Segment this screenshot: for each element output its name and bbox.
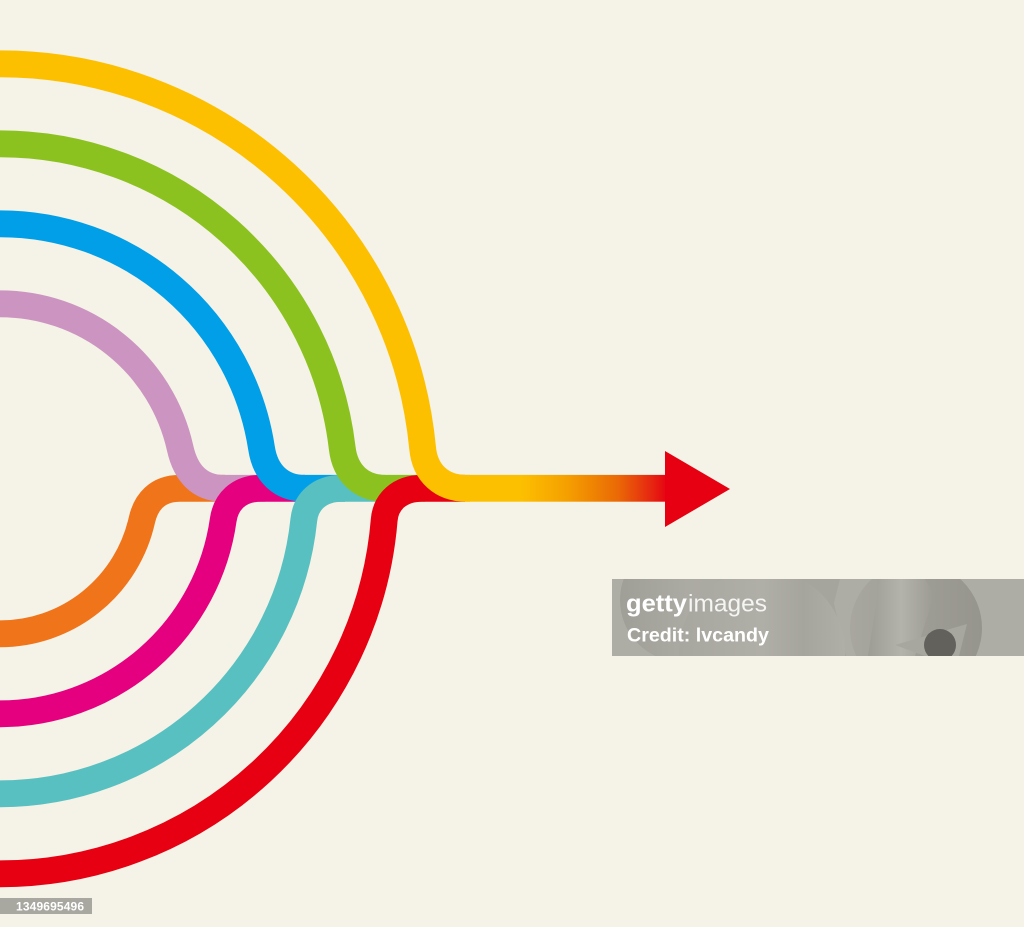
orange line <box>0 488 225 634</box>
image id tag: 1349695496 <box>16 900 84 914</box>
purple line <box>0 304 265 488</box>
image id tag <box>0 898 92 914</box>
watermark banner <box>612 579 1024 656</box>
red line <box>0 488 465 874</box>
arrow head <box>665 451 730 527</box>
watermark credit: Credit: lvcandy <box>627 626 769 646</box>
pink line <box>0 488 305 714</box>
yellow line <box>0 64 470 488</box>
gradient arrow shaft <box>465 475 668 502</box>
blue line <box>0 224 345 488</box>
teal line <box>0 488 385 794</box>
watermark logo text: images <box>688 590 767 618</box>
green line <box>0 144 425 488</box>
watermark logo text: getty <box>626 590 688 618</box>
